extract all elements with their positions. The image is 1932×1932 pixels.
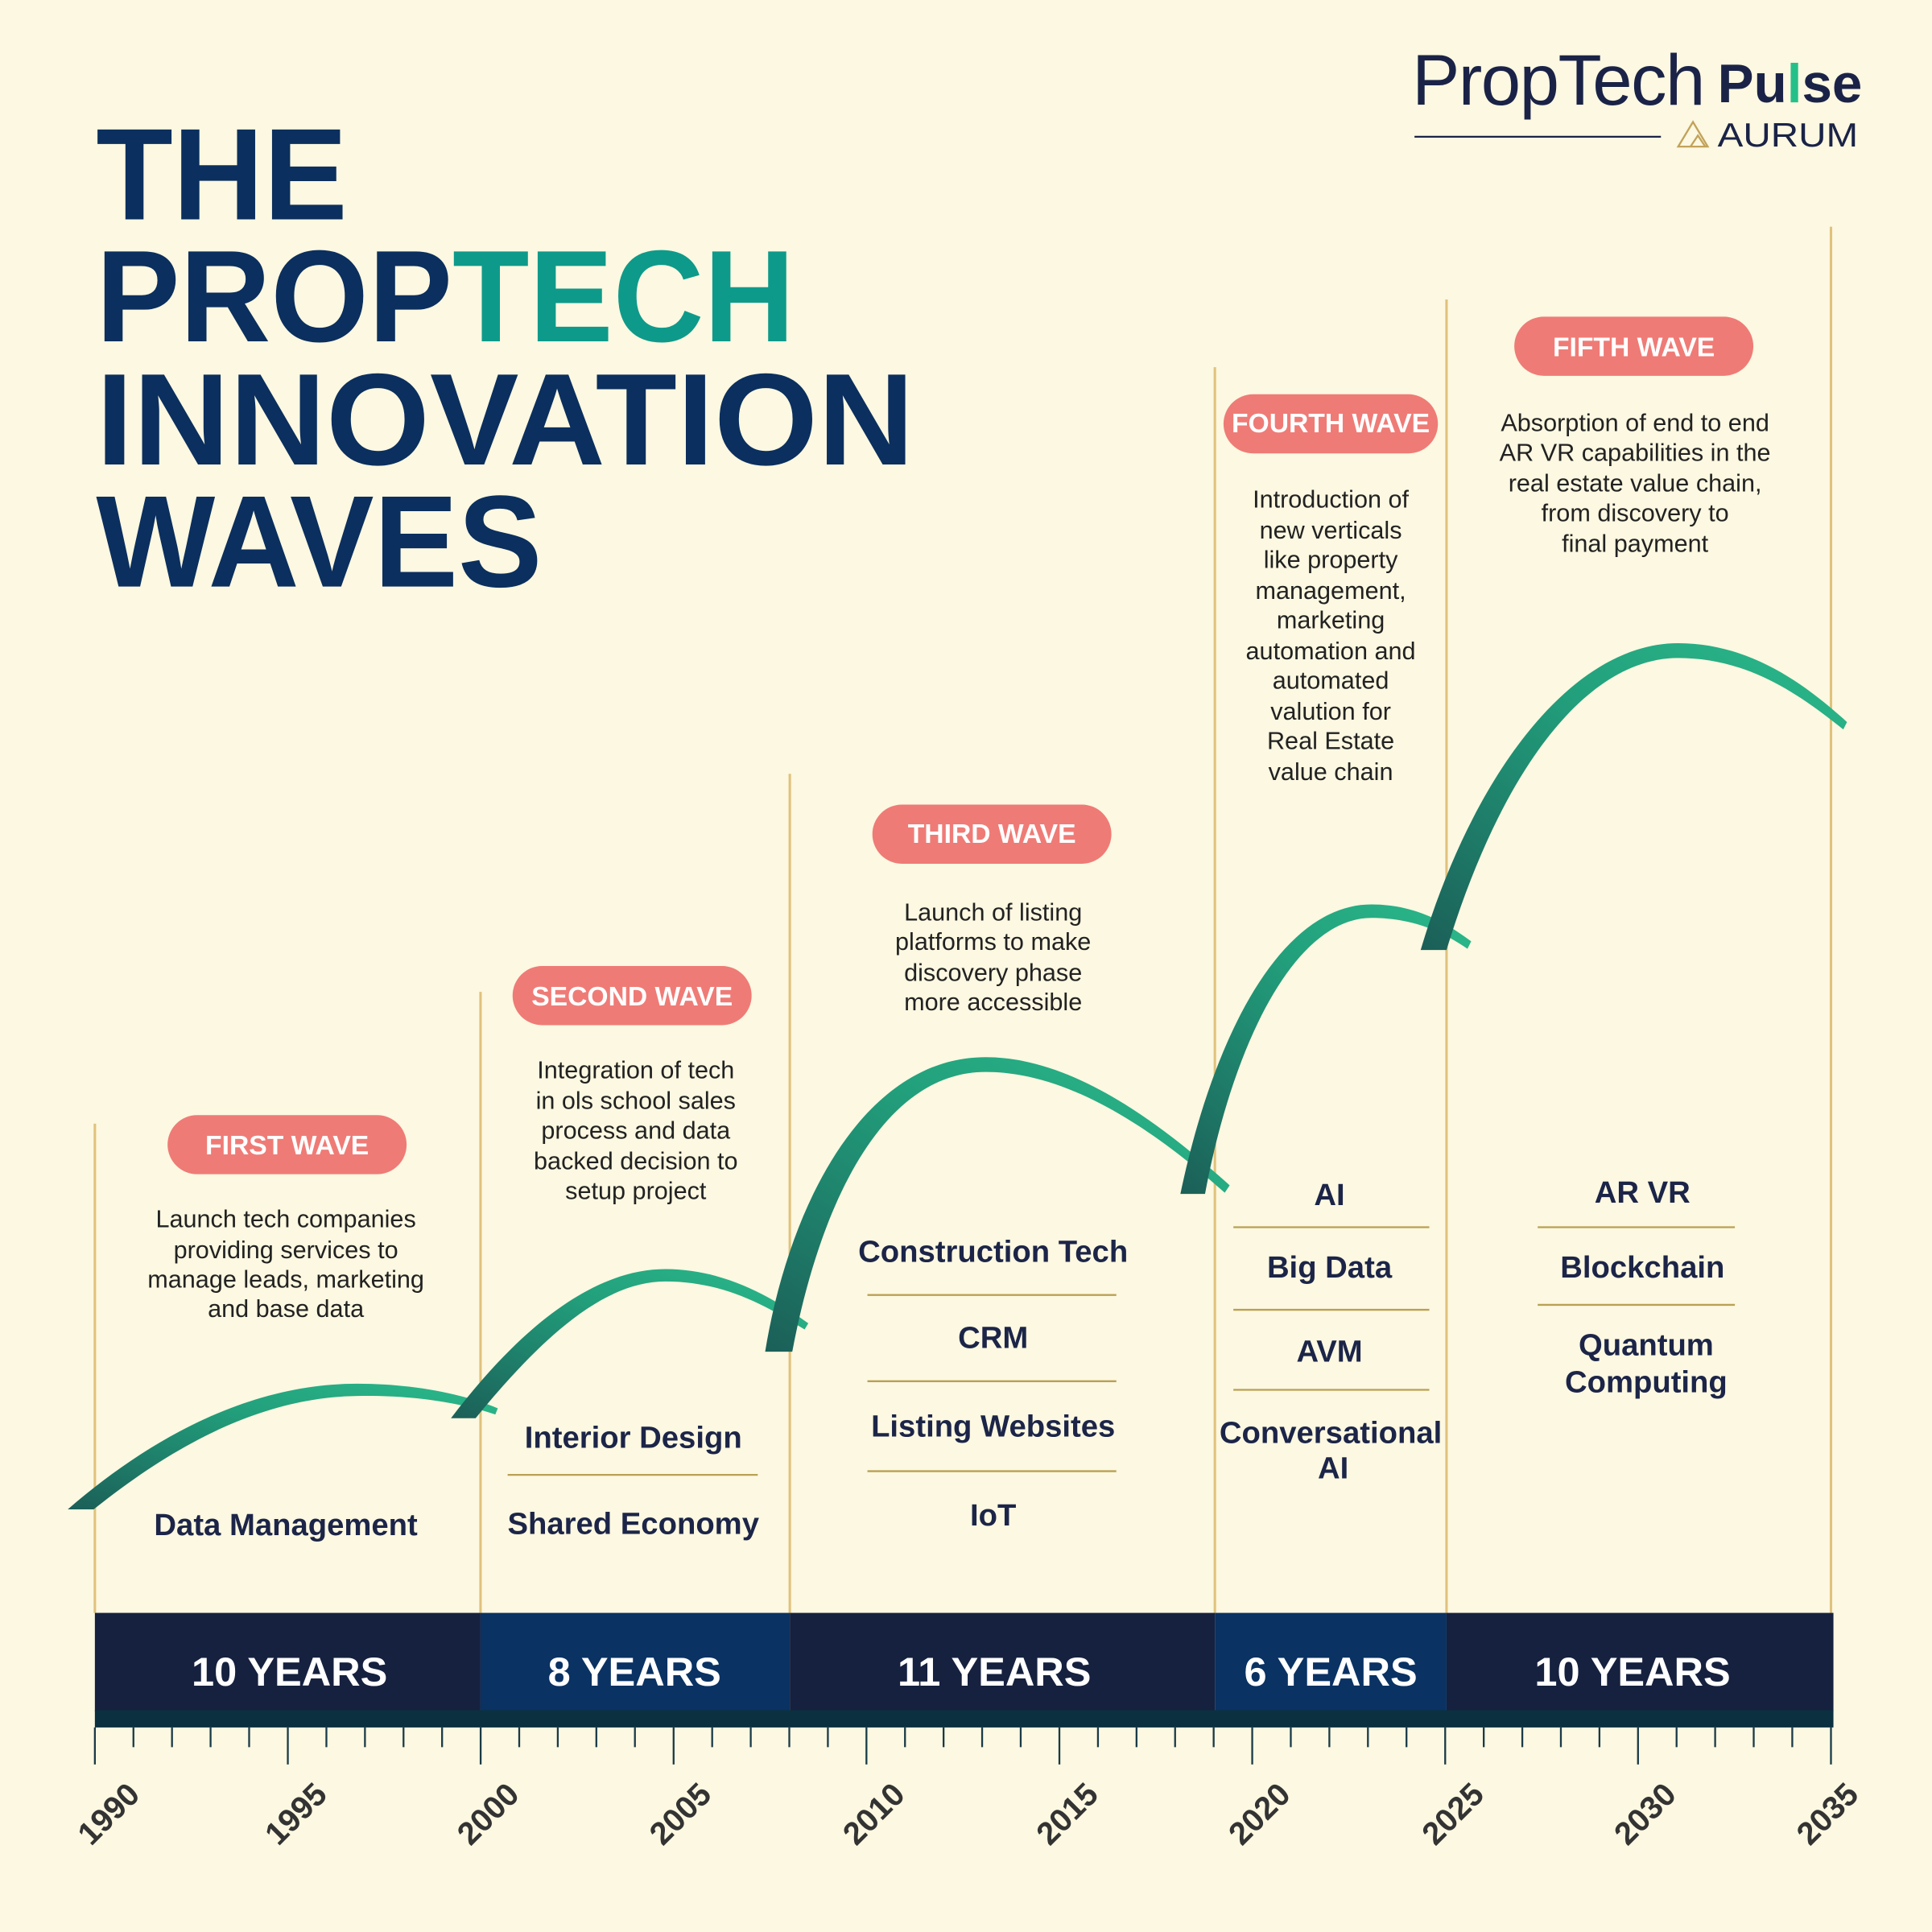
wave 3 panel: THIRD WAVE <box>908 819 1076 849</box>
vertical gold lines <box>95 227 1831 1613</box>
wave 1 panel: Launch tech companies <box>155 1205 416 1232</box>
wave 3 panel <box>858 804 1128 1533</box>
year labels: 2030 <box>1608 1777 1683 1852</box>
logo: Pulse <box>1718 54 1862 114</box>
wave 4 panel: Introduction of <box>1253 486 1410 514</box>
wave 5 panel: AR VR capabilities in the <box>1500 439 1771 466</box>
wave 2 panel: setup project <box>565 1177 707 1204</box>
wave 1 panel: manage leads, marketing <box>147 1265 424 1293</box>
wave 5 panel <box>1500 316 1771 1400</box>
year labels: 2035 <box>1790 1777 1865 1852</box>
wave 5 panel: real estate value chain, <box>1509 470 1762 497</box>
wave 1 panel <box>147 1115 424 1542</box>
duration bar: 6 YEARS <box>1244 1649 1418 1695</box>
wave 5 panel: Computing <box>1565 1365 1728 1400</box>
wave 2 panel <box>508 966 760 1542</box>
year labels: 2020 <box>1222 1777 1298 1852</box>
wave 4 panel: value chain <box>1269 758 1393 786</box>
wave 3 panel: Launch of listing <box>904 898 1082 926</box>
wave 5 panel: Quantum <box>1579 1328 1714 1363</box>
wave 4 panel: marketing <box>1277 607 1385 634</box>
year labels: 2010 <box>836 1777 912 1852</box>
duration bar: 10 YEARS <box>1534 1649 1731 1695</box>
wave 2 panel: process and data <box>541 1117 731 1144</box>
wave 4 panel: valution for <box>1270 698 1391 725</box>
wave 5 panel: final payment <box>1562 530 1709 558</box>
wave 3 panel: IoT <box>970 1498 1016 1533</box>
wave 4 panel: AI <box>1318 1451 1348 1486</box>
wave 3 panel: Construction Tech <box>858 1234 1128 1269</box>
wave 4 panel: automated <box>1273 667 1389 695</box>
logo: PropTech <box>1412 40 1704 120</box>
wave 2 panel: in ols school sales <box>536 1088 736 1115</box>
title <box>96 101 914 615</box>
title: WAVES <box>96 469 542 615</box>
year labels: 2000 <box>451 1777 526 1852</box>
year labels: 2005 <box>643 1777 718 1852</box>
wave 4 panel: AVM <box>1296 1334 1363 1368</box>
title: PROPTECH <box>96 224 795 369</box>
wave 5 panel: from discovery to <box>1542 499 1729 526</box>
wave 4 panel: Real Estate <box>1267 728 1394 755</box>
duration bar: 10 YEARS <box>192 1649 387 1695</box>
wave 4 panel: Big Data <box>1267 1250 1393 1285</box>
wave 1 panel: Data Management <box>154 1508 418 1542</box>
year labels: 2015 <box>1030 1777 1105 1852</box>
wave 4 panel: Conversational <box>1220 1415 1442 1450</box>
wave 3 panel: CRM <box>958 1320 1028 1355</box>
wave 4 panel <box>1220 394 1442 1486</box>
year labels: 2025 <box>1415 1777 1491 1852</box>
wave 4 panel: management, <box>1255 577 1406 605</box>
wave 2 panel: Integration of tech <box>537 1056 734 1084</box>
wave 2 panel: Interior Design <box>525 1420 742 1455</box>
wave 5 panel: AR VR <box>1595 1175 1690 1210</box>
wave 5 panel: Absorption of end to end <box>1501 410 1769 437</box>
wave 1 panel: FIRST WAVE <box>205 1131 369 1161</box>
wave 5 panel: FIFTH WAVE <box>1553 332 1715 362</box>
title: INNOVATION <box>96 347 914 493</box>
wave 4 panel: automation and <box>1246 638 1416 665</box>
wave 2 panel: SECOND WAVE <box>531 982 733 1012</box>
wave 1 panel: and base data <box>208 1295 365 1323</box>
wave curves <box>68 643 1847 1509</box>
year labels: 1990 <box>71 1777 147 1852</box>
wave 2 panel: Shared Economy <box>508 1507 760 1542</box>
wave 3 panel: Listing Websites <box>871 1410 1115 1444</box>
year labels: 1995 <box>258 1777 334 1852</box>
timeline axis ticks <box>95 1728 1831 1765</box>
wave 4 panel: AI <box>1314 1178 1345 1212</box>
wave 5 panel: Blockchain <box>1560 1250 1724 1285</box>
title: THE <box>96 101 348 247</box>
wave 4 panel: new verticals <box>1260 517 1402 544</box>
wave 4 panel: like property <box>1264 547 1398 574</box>
wave 2 panel: backed decision to <box>534 1148 738 1175</box>
logo <box>1412 40 1862 154</box>
duration bar <box>95 1613 1834 1728</box>
wave 3 panel: discovery phase <box>904 959 1082 986</box>
wave 4 panel: FOURTH WAVE <box>1232 409 1430 439</box>
wave 1 panel: providing services to <box>174 1236 398 1264</box>
duration bar: 8 YEARS <box>548 1649 721 1695</box>
wave 3 panel: more accessible <box>904 989 1082 1016</box>
wave 3 panel: platforms to make <box>895 928 1091 956</box>
year labels <box>71 1777 1865 1852</box>
duration bar: 11 YEARS <box>898 1649 1091 1695</box>
logo: AURUM <box>1718 117 1858 154</box>
